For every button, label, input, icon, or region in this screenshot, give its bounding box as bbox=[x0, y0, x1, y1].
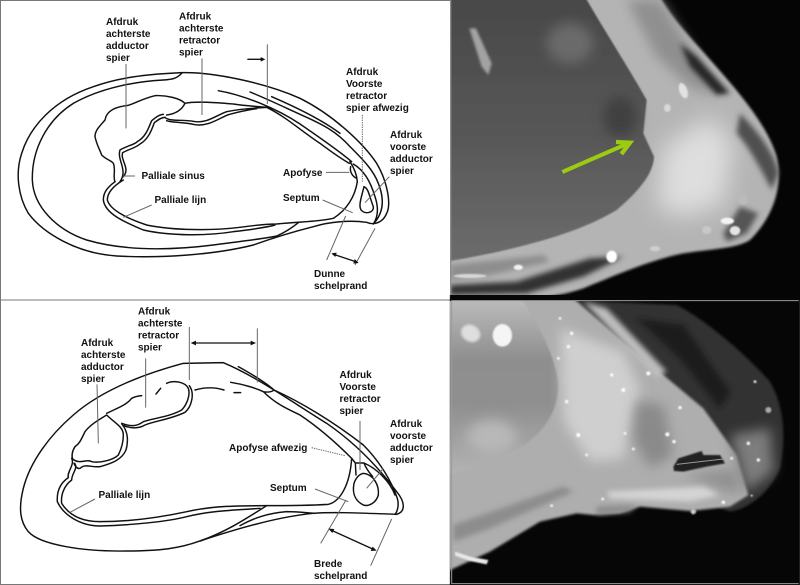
label: Afdruk achterste adductor spier (top): achterste bbox=[106, 29, 151, 40]
label: Septum (top): Septum bbox=[283, 193, 320, 204]
arrows bbox=[247, 59, 357, 262]
bright spots in cavity bbox=[493, 324, 512, 347]
specular highlights bbox=[453, 82, 748, 278]
photo: top, shell edge with arrow bbox=[447, 0, 800, 300]
pallial line bbox=[103, 162, 357, 235]
anterior adductor imprint bbox=[353, 473, 378, 505]
label: Afdruk voorste adductor spier (top): spier bbox=[390, 166, 414, 177]
lower darker rim bbox=[450, 257, 623, 295]
label: Afdruk achterste adductor spier (top): adductor bbox=[106, 41, 149, 52]
label: Afdruk Voorste retractor spier afwezig: Afdruk bbox=[346, 67, 378, 78]
label: Afdruk Voorste retractor spier afwezig: Voorste bbox=[346, 79, 383, 90]
diagram: bottom shell, broad margin bbox=[21, 327, 403, 566]
apophysis bbox=[350, 167, 357, 178]
bright central band bbox=[657, 117, 733, 217]
dotted leader: Apofyse afwezig bbox=[312, 448, 345, 456]
label: Afdruk Voorste retractor spier: Voorste bbox=[340, 382, 376, 393]
label: Afdruk achterste retractor spier (bottom): Afdruk bbox=[138, 306, 170, 318]
label: Afdruk Voorste retractor spier afwezig: spier afwezig bbox=[346, 103, 409, 114]
label: Afdruk voorste adductor spier (bottom): spier bbox=[390, 455, 414, 466]
outer shell outline bbox=[21, 363, 403, 551]
reflection in cavity bbox=[469, 28, 492, 75]
label: Brede schelprand: Brede bbox=[314, 559, 342, 570]
arrows bbox=[195, 343, 373, 549]
photo frame bbox=[452, 301, 799, 584]
label: Palliale sinus: Palliale sinus bbox=[142, 171, 205, 182]
cavity dark patch bbox=[603, 97, 637, 137]
posterior adductor imprint bbox=[95, 96, 185, 182]
label: Afdruk achterste retractor spier (top): achterste bbox=[179, 24, 224, 34]
label: Afdruk voorste adductor spier (top): voorste bbox=[390, 142, 427, 153]
diagram: top shell, thin margin bbox=[18, 44, 389, 265]
doubled imprint outline bbox=[74, 424, 127, 468]
main shell margin bbox=[447, 298, 748, 572]
panel: bottom diagram background bbox=[0, 300, 450, 584]
green arrow bbox=[562, 142, 630, 172]
label: Afdruk achterste adductor spier (bottom): achterste bbox=[81, 350, 126, 361]
posterior retractor imprint bbox=[165, 102, 267, 125]
leader lines bbox=[70, 327, 392, 566]
label: Afdruk voorste adductor spier (top): Afdruk bbox=[390, 130, 422, 141]
anterior adductor imprint bbox=[360, 187, 373, 213]
label: Brede schelprand: schelprand bbox=[314, 571, 367, 582]
grey streak along upper margin bbox=[627, 0, 717, 97]
label: Afdruk achterste retractor spier (top): spier bbox=[179, 48, 203, 58]
posterior retractor imprint bbox=[107, 382, 192, 428]
dorsal lines bbox=[195, 367, 398, 514]
label: Afdruk achterste retractor spier (bottom): retractor bbox=[138, 330, 179, 342]
streaks bbox=[583, 302, 667, 378]
label: Afdruk Voorste retractor spier: Afdruk bbox=[340, 370, 372, 381]
label: Afdruk achterste adductor spier (bottom): spier bbox=[81, 374, 105, 385]
cavity light patch bbox=[547, 23, 593, 63]
dorsal lines bbox=[218, 91, 382, 224]
label: Septum (bottom): Septum bbox=[270, 483, 307, 494]
leader lines bbox=[123, 44, 389, 265]
ventral shell lines bbox=[200, 506, 315, 541]
label: Afdruk achterste retractor spier (top): Afdruk bbox=[179, 12, 211, 22]
label: Dunne schelprand: schelprand bbox=[314, 281, 367, 292]
label: Afdruk achterste retractor spier (top): retractor bbox=[179, 36, 220, 46]
label: Afdruk voorste adductor spier (bottom): adductor bbox=[390, 443, 433, 454]
label: Apofyse: Apofyse bbox=[283, 168, 323, 179]
label: Afdruk achterste adductor spier (top): spier bbox=[106, 53, 130, 64]
label: Afdruk voorste adductor spier (bottom): Afdruk bbox=[390, 419, 422, 430]
label: Afdruk voorste adductor spier (top): adductor bbox=[390, 154, 433, 165]
inner shell line bbox=[32, 73, 298, 249]
label: Palliale lijn (top): Palliale lijn bbox=[154, 195, 206, 206]
panel: top diagram background bbox=[0, 0, 450, 300]
pale band bbox=[560, 328, 640, 462]
shell margin bbox=[447, 0, 779, 300]
dark scar marks bbox=[673, 451, 725, 472]
label: Afdruk achterste adductor spier (bottom): Afdruk bbox=[81, 338, 113, 349]
posterior adductor imprint bbox=[72, 415, 123, 462]
label: Afdruk voorste adductor spier (bottom): voorste bbox=[390, 431, 427, 442]
translucent dark margin bbox=[567, 300, 783, 512]
label: Afdruk Voorste retractor spier: spier bbox=[340, 406, 364, 417]
photo: bottom, shell edge bbox=[447, 295, 800, 585]
cavity bbox=[447, 298, 558, 475]
label: Afdruk achterste retractor spier (bottom): spier bbox=[138, 342, 162, 354]
pallial sinus bbox=[119, 114, 165, 182]
small white tip at lower left bbox=[455, 552, 488, 564]
label: Afdruk achterste retractor spier (bottom): achterste bbox=[138, 318, 183, 330]
dotted leader: Voorste retractor afwezig bbox=[361, 115, 364, 182]
photo left edge bbox=[450, 0, 451, 299]
dark speckled edge bbox=[737, 113, 778, 190]
label: Apofyse afwezig: Apofyse afwezig bbox=[229, 443, 307, 454]
label: Afdruk achterste adductor spier (top): Afdruk bbox=[106, 17, 138, 28]
inner shell cavity bbox=[447, 0, 654, 262]
label: Afdruk achterste adductor spier (bottom): adductor bbox=[81, 362, 124, 373]
outer shell outline bbox=[18, 73, 389, 257]
pallial line bbox=[57, 458, 352, 526]
label: Dunne schelprand: Dunne bbox=[314, 269, 345, 280]
grey patch bbox=[633, 402, 673, 468]
glitter highlights bbox=[550, 317, 771, 514]
label: Palliale lijn (bottom): Palliale lijn bbox=[98, 490, 150, 501]
label: Afdruk Voorste retractor spier afwezig: retractor bbox=[346, 91, 387, 102]
label: Afdruk Voorste retractor spier: retractor bbox=[340, 394, 381, 405]
